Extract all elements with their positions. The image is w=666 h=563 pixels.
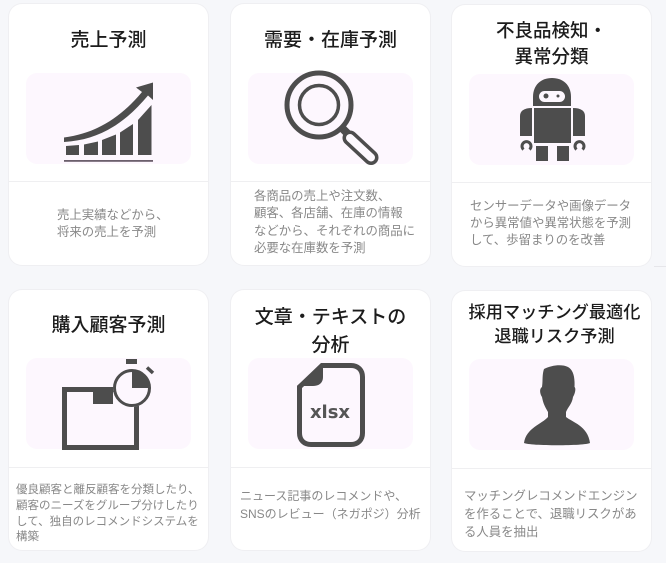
icon panel: sales forecast (26, 73, 191, 164)
card: sales forecast (9, 4, 208, 265)
title: purchasing customer forecast: 購入顧客予測 (51, 315, 166, 336)
title: sales forecast: 売上予測 (70, 30, 146, 51)
title: document and text analysis: 分析 (311, 335, 350, 356)
description: 必要な在庫数を予測 (254, 241, 366, 255)
divider (9, 467, 208, 468)
icon panel: purchasing customer (26, 358, 191, 449)
description: 顧客、各店舗、在庫の情報 (254, 206, 403, 220)
icon: magnifying glass (284, 70, 378, 165)
title: defect detection and anomaly classification: 不良品検知・ (496, 20, 607, 41)
icon: person silhouette (524, 365, 590, 446)
description: マッチングレコメンドエンジン (464, 488, 637, 502)
description: SNSのレビュー（ネガポジ）分析 (240, 507, 421, 521)
card: purchasing customer forecast (9, 290, 208, 550)
description: センサーデータや画像データ (470, 199, 631, 213)
divider (231, 181, 430, 182)
description: 将来の売上を予測 (57, 225, 156, 239)
description (57, 208, 169, 239)
description (254, 189, 415, 255)
divider (231, 467, 430, 468)
description: から異常値や異常状態を予測 (470, 216, 631, 230)
divider (9, 181, 208, 182)
description (16, 483, 200, 543)
description (470, 199, 631, 247)
icon: xlsx file (297, 363, 365, 447)
description: して、独自のレコメンドシステムを (16, 516, 199, 528)
divider (452, 468, 651, 469)
title: defect detection and anomaly classification: 異常分類 (514, 46, 588, 67)
icon panel: text analysis (248, 358, 413, 449)
icon: rising bar chart with arrow (64, 82, 153, 162)
description: 優良顧客と離反顧客を分類したり、 (16, 484, 200, 496)
description: を作ることで、退職リスクがあ (464, 507, 637, 521)
card: recruiting match and attrition risk (452, 291, 651, 551)
icon: box with stopwatch (62, 359, 154, 450)
icon panel: demand and inventory (248, 73, 413, 164)
description: る人員を抽出 (464, 525, 538, 539)
title: demand and inventory: 需要・在庫予測 (264, 30, 397, 51)
icon panel: recruiting (469, 359, 634, 450)
description: ニュース記事のレコメンドや、 (240, 489, 407, 503)
description (240, 489, 421, 521)
icon: robot (520, 78, 586, 161)
stray divider at right edge (654, 266, 666, 267)
title: defect detection and anomaly classification (496, 20, 607, 67)
description: 顧客のニーズをグループ分けしたり (16, 500, 199, 512)
file type label: xlsx (310, 402, 350, 423)
icon panel: defect detection (469, 74, 634, 165)
title: document and text analysis: 文章・テキストの (255, 307, 406, 328)
title: document and text analysis (255, 307, 406, 356)
description: 売上実績などから、 (57, 208, 169, 222)
card: defect detection (452, 5, 651, 266)
description (464, 488, 637, 539)
title: recruiting match and attrition: 採用マッチング最適化 (469, 302, 640, 322)
description: 構築 (16, 531, 39, 543)
description: して、歩留まりのを改善 (470, 233, 605, 247)
title: recruiting match and attrition (469, 302, 640, 346)
card: text analysis (231, 290, 430, 550)
description: 各商品の売上や注文数、 (254, 189, 390, 203)
description: などから、それぞれの商品に (254, 224, 415, 238)
title: recruiting match and attrition: 退職リスク予測 (494, 326, 615, 346)
card: demand and inventory forecast (231, 4, 430, 265)
divider (452, 182, 651, 183)
